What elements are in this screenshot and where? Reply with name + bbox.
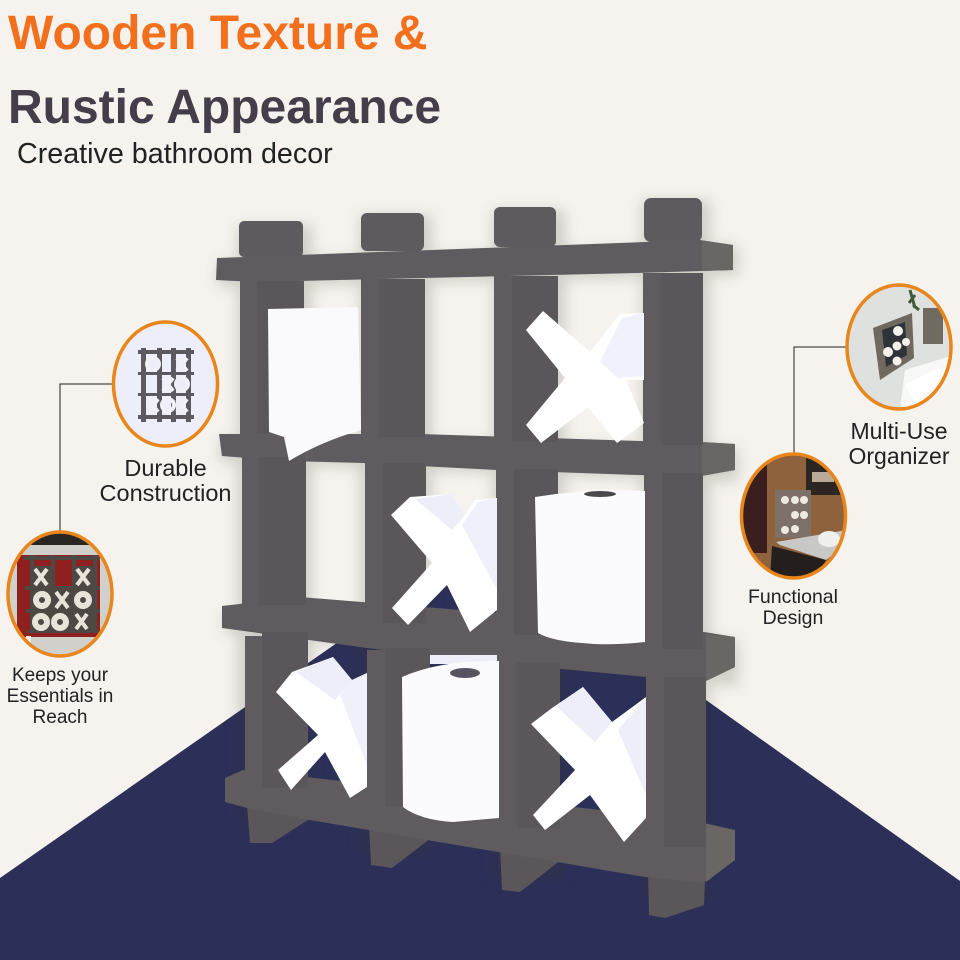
icon: thumbnail multi-use [847, 284, 951, 410]
icon: thumbnail durable [114, 322, 218, 446]
label multi-use [848, 418, 950, 469]
label durable: Durable [124, 455, 207, 481]
label durable: Construction [100, 480, 231, 506]
posts row 1 [240, 273, 661, 445]
label essentials: Keeps your [12, 665, 108, 686]
X bottom left [276, 657, 367, 798]
label multi-use: Organizer [848, 443, 949, 469]
connector right [794, 347, 848, 454]
icon: thumbnail functional [741, 453, 847, 579]
toilet paper sheet [268, 307, 361, 461]
title: Rustic Appearance [8, 81, 441, 134]
stubs [239, 221, 303, 257]
X middle [391, 494, 497, 632]
posts row 2 [242, 457, 662, 648]
rails [216, 240, 735, 883]
label durable [100, 455, 231, 506]
icon: thumbnail essentials [7, 531, 113, 657]
feet [247, 805, 705, 918]
label functional: Functional [748, 586, 838, 608]
label functional: Design [763, 607, 823, 629]
rail end grain [702, 241, 735, 882]
label essentials: Essentials in [7, 686, 113, 707]
label essentials: Reach [33, 707, 87, 728]
posts row 3 [245, 636, 664, 847]
title [8, 7, 441, 134]
illustration [0, 194, 960, 960]
label multi-use: Multi-Use [850, 418, 948, 444]
connector left [60, 384, 114, 532]
subtitle: Creative bathroom decor [17, 138, 333, 170]
navy floor background [0, 541, 960, 960]
label essentials [7, 665, 113, 728]
shelf product [216, 198, 735, 918]
title: Wooden Texture & [8, 7, 428, 60]
roll bottom [402, 655, 499, 822]
roll middle [535, 490, 645, 644]
X bottom right [531, 687, 646, 842]
X top right [526, 311, 644, 443]
label functional [748, 586, 838, 629]
soft shelf shadow [218, 200, 738, 900]
